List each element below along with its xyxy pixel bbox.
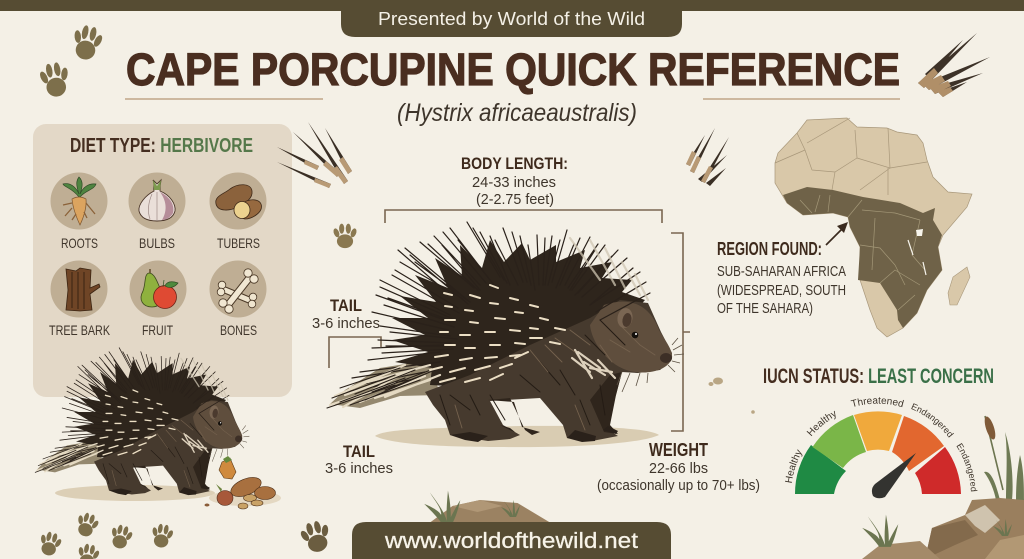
diet label: bulbs: BULBS [139, 235, 175, 251]
gauge labels: Healthy [785, 449, 802, 483]
weight label: WEIGHT [649, 440, 708, 460]
body length values [472, 175, 556, 208]
subtitle: (Hystrix africaeaustralis) [397, 99, 637, 127]
scenery: rock and grass centre [424, 491, 550, 523]
weight label: (occasionally up to 70+ lbs) [597, 478, 760, 494]
tail label lower: 3-6 inches [325, 461, 393, 477]
body length values: 24-33 inches [472, 175, 556, 191]
tail label lower [325, 442, 393, 477]
icon: paw centre [332, 224, 358, 248]
diet label: tubers: TUBERS [217, 235, 260, 251]
small stones [708, 378, 755, 414]
header band [0, 0, 1024, 37]
diet item: tubers [210, 172, 266, 230]
region text [717, 239, 846, 317]
main porcupine [327, 222, 684, 447]
footer website banner [352, 522, 671, 559]
body length dimension [385, 154, 662, 223]
tail label upper: TAIL [330, 296, 362, 315]
weight label: 22-66 lbs [649, 461, 708, 477]
body length heading: BODY LENGTH: [461, 154, 568, 173]
region text: SUB-SAHARAN AFRICA [717, 264, 846, 280]
diet item: roots [50, 172, 108, 230]
tail label upper [312, 296, 381, 368]
region text: REGION FOUND: [717, 239, 822, 259]
gauge needle [872, 453, 916, 498]
icon: quills top right [918, 33, 990, 97]
panel: diet [33, 124, 292, 397]
diet item: tree bark [50, 260, 108, 318]
scenery: rock and grass far right lower [862, 515, 1012, 559]
food pile [204, 456, 281, 509]
madagascar [948, 267, 970, 305]
IUCN gauge [785, 397, 978, 498]
lake [916, 229, 923, 236]
diet label: fruit: FRUIT [142, 322, 173, 338]
body length bracket [385, 210, 662, 223]
weight label [597, 440, 760, 494]
icon: paw bottom centre [297, 518, 335, 555]
arrow: region pointer [826, 222, 848, 245]
region text: OF THE SAHARA) [717, 301, 813, 317]
gauge labels: Endangered [911, 403, 954, 438]
tail label lower: TAIL [343, 442, 375, 461]
diet label: tree bark: TREE BARK [49, 322, 111, 338]
weight bracket [671, 233, 690, 431]
title rules [125, 98, 900, 100]
range shading [783, 187, 942, 328]
body length values: (2-2.75 feet) [476, 192, 554, 208]
diet label: bones: BONES [220, 322, 257, 338]
scenery: rocks right [925, 498, 1024, 559]
icon: paw prints top left [37, 23, 106, 99]
diet item: fruit [130, 260, 186, 318]
map of Africa [775, 118, 972, 337]
shadow [55, 485, 215, 501]
diet item: bulbs [128, 172, 186, 230]
gauge labels: Endangered [956, 443, 978, 492]
header band: Presented by World of the Wild [378, 9, 645, 29]
icon: quills centre left [277, 122, 352, 188]
tail label upper: 3-6 inches [312, 316, 380, 332]
title: CAPE PORCUPINE QUICK REFERENCE [126, 44, 900, 95]
footer website banner: www.worldofthewild.net [384, 528, 638, 553]
scenery: cattail and grass right [982, 415, 1024, 500]
small porcupine eating [35, 348, 281, 509]
gauge labels: Healthy [806, 410, 836, 436]
diet label: roots: ROOTS [61, 235, 98, 251]
diet heading: DIET TYPE: HERBIVORE [70, 135, 253, 157]
gauge labels: Threatened [850, 397, 904, 408]
icon: quills centre right [686, 128, 729, 186]
ground shadow [375, 426, 659, 447]
paw prints bottom left [36, 510, 175, 559]
region text: (WIDESPREAD, SOUTH [717, 283, 846, 299]
gauge labels [785, 397, 978, 492]
diet item: bones [210, 260, 266, 318]
